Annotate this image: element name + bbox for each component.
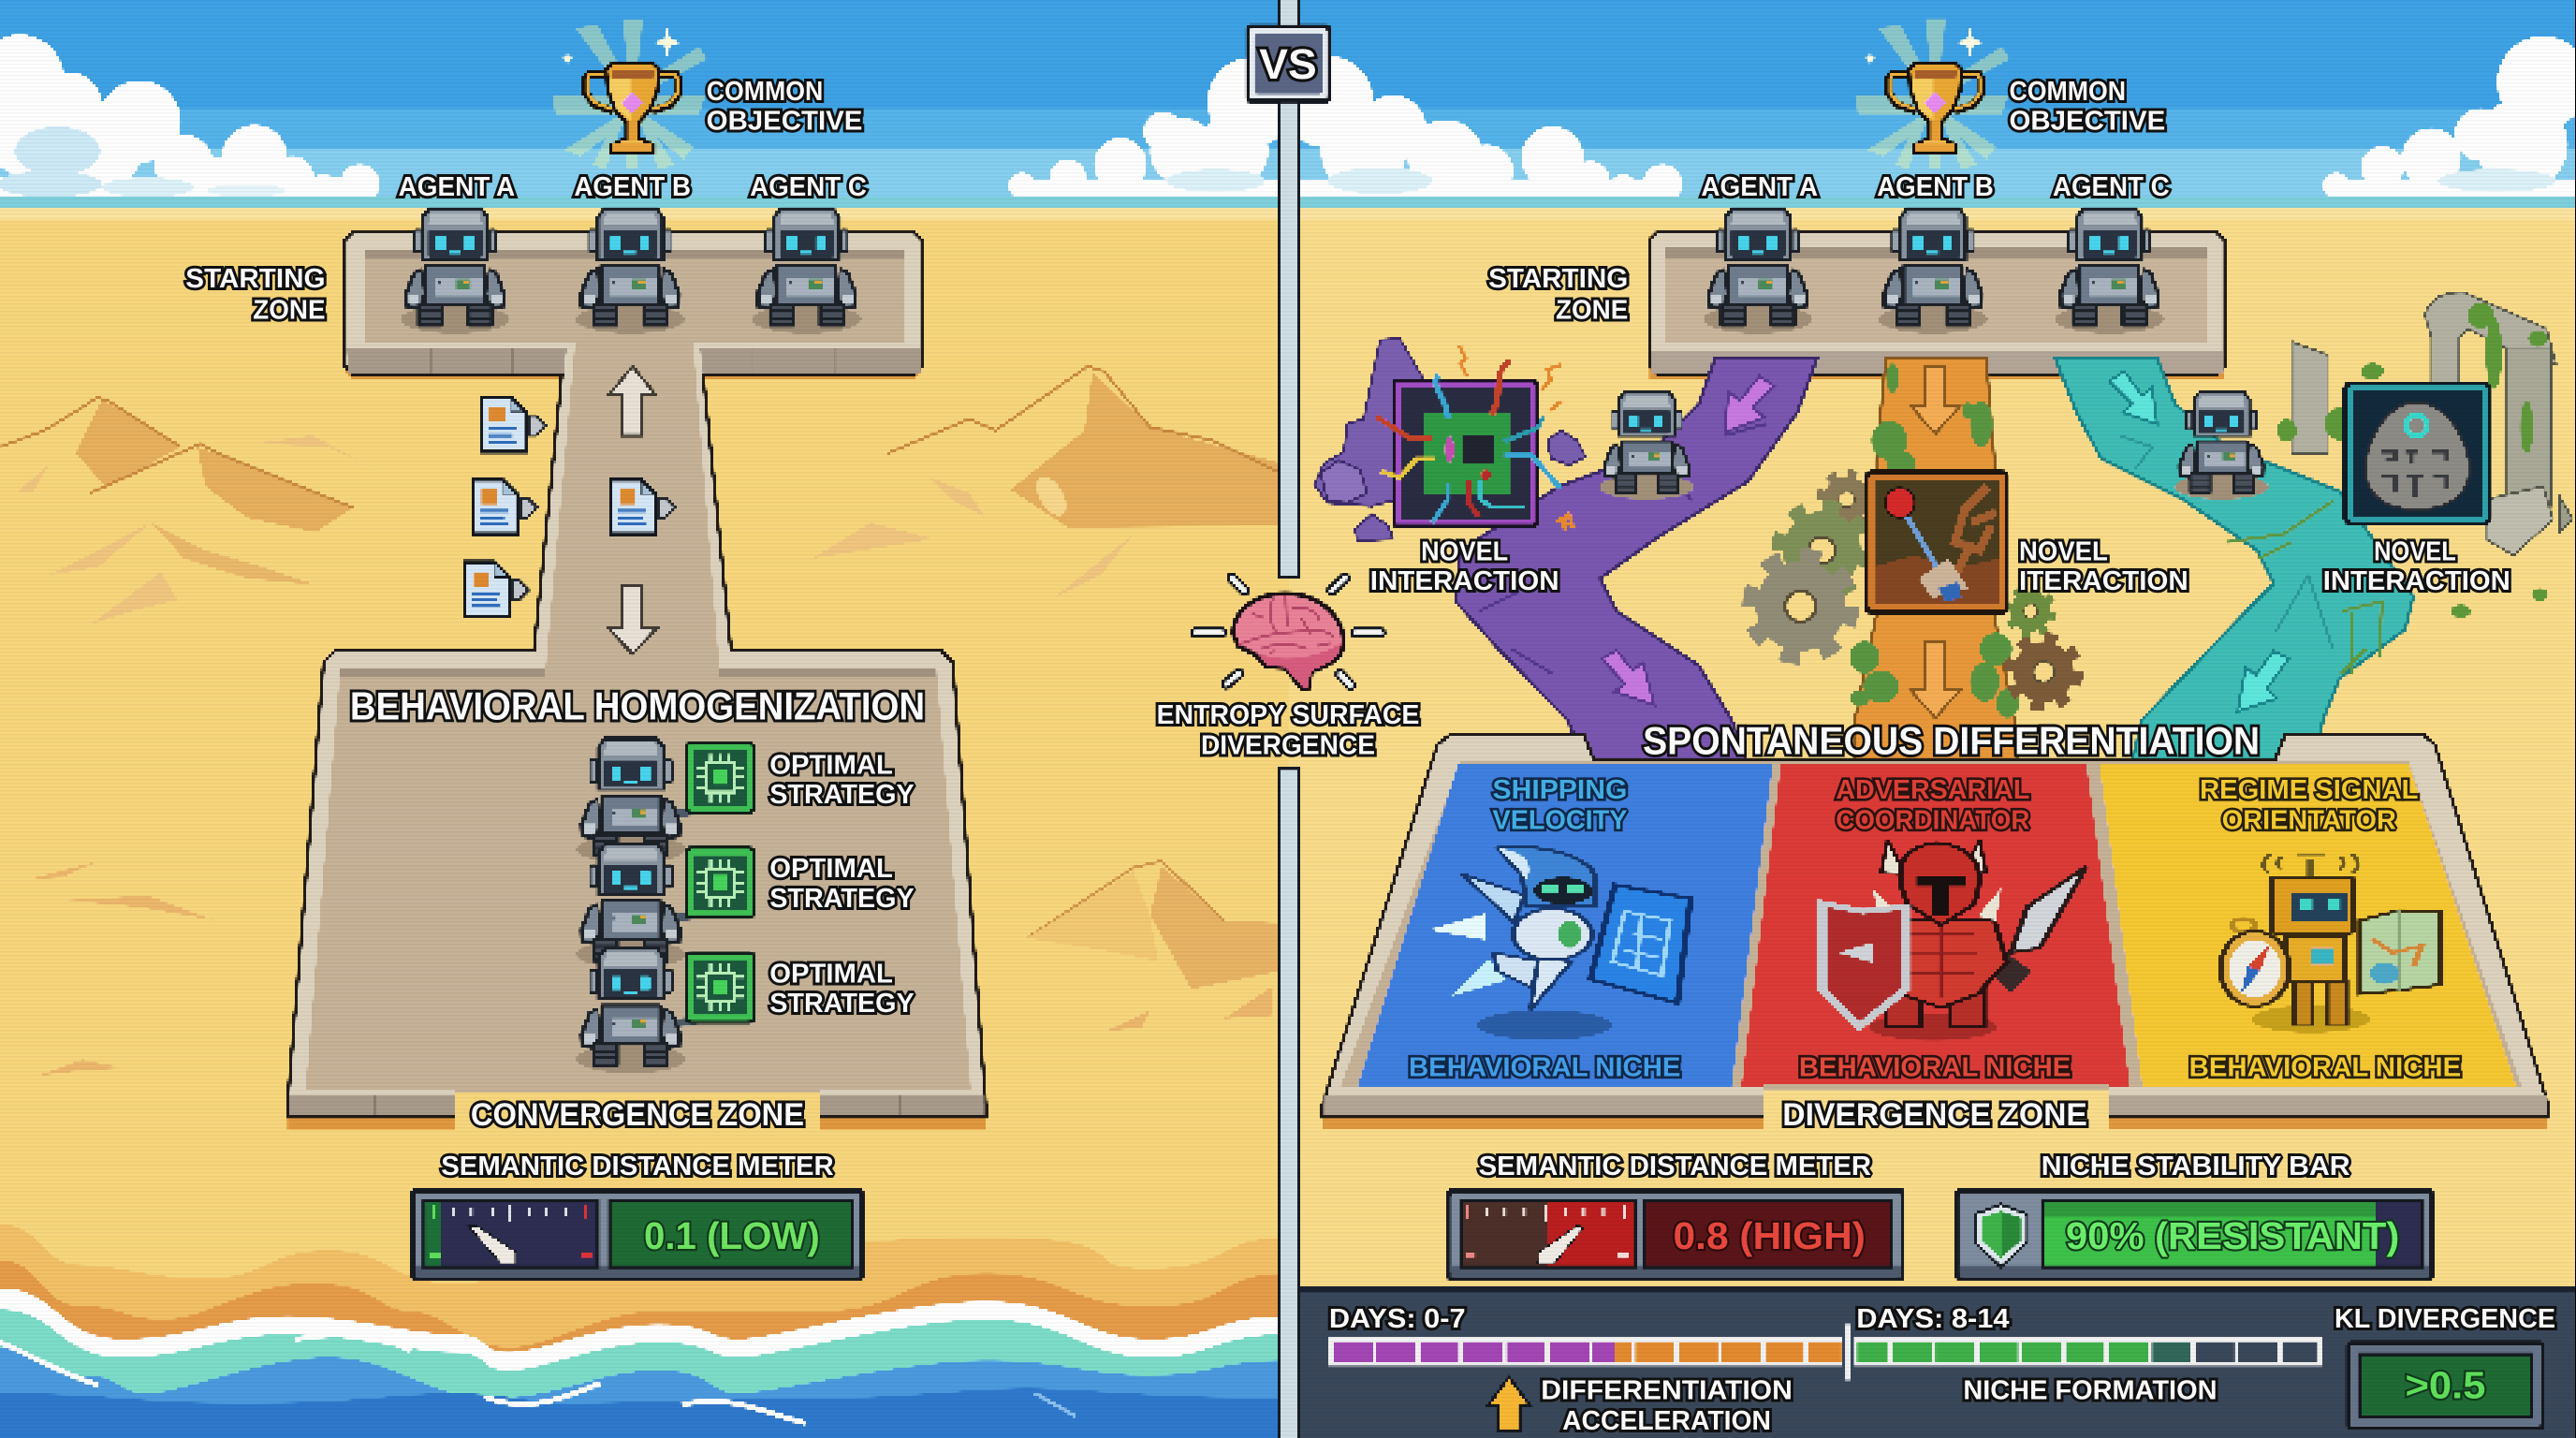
label: regime signal orientator <box>2200 775 2419 835</box>
beach and waves <box>0 1225 1288 1438</box>
label: adversarial coordinator <box>1836 775 2030 835</box>
label: optimal strategy 1 <box>769 751 915 810</box>
label: novel interaction teal <box>2323 536 2510 596</box>
label: optimal strategy 1: STRATEGY <box>769 780 915 810</box>
sand <box>0 207 1288 1292</box>
value: 0.1 low: 0.1 (LOW) <box>644 1214 820 1257</box>
label: agent names: AGENT A <box>399 172 515 202</box>
converged robots <box>577 737 703 1073</box>
label: niche formation: NICHE FORMATION <box>1963 1375 2217 1405</box>
label: common objective <box>2009 77 2165 137</box>
label: days 8-14: DAYS: 8-14 <box>1856 1304 2009 1334</box>
label: differentiation acceleration: DIFFERENTIATION <box>1541 1375 1793 1405</box>
label: behavioral niche yellow: BEHAVIORAL NICHE <box>2189 1053 2461 1083</box>
label: adversarial coordinator: COORDINATOR <box>1836 805 2030 835</box>
dunes right <box>30 366 1288 1077</box>
label: behavioral niche blue: BEHAVIORAL NICHE <box>1409 1053 1680 1083</box>
label: kl divergence: KL DIVERGENCE <box>2334 1304 2555 1334</box>
sand <box>1288 207 2576 1292</box>
document 2 <box>473 479 537 534</box>
sky <box>1288 0 2576 200</box>
label: entropy surface divergence: ENTROPY SURFACE <box>1157 700 1419 730</box>
horizon <box>0 198 1288 207</box>
label: agent names <box>1701 172 2170 202</box>
novel interaction: lever panel <box>1865 470 2009 614</box>
moss on orange path <box>1850 363 2019 718</box>
label: common objective: OBJECTIVE <box>2009 107 2165 137</box>
sparks <box>1459 345 1573 531</box>
purple path <box>1456 359 1817 772</box>
timeline hud panel <box>1295 1286 2576 1438</box>
dunes left <box>0 398 374 624</box>
label: semantic distance meter: SEMANTIC DISTANCE METER <box>1479 1152 1871 1181</box>
label: convergence zone: CONVERGENCE ZONE <box>471 1097 804 1133</box>
semantic distance meter left <box>411 1188 864 1282</box>
label: novel interaction purple <box>1370 536 1559 596</box>
left scene artwork <box>0 0 1296 1438</box>
label: adversarial coordinator: ADVERSARIAL <box>1836 775 2029 805</box>
label: differentiation acceleration: ACCELERATION <box>1562 1406 1771 1436</box>
label: novel interaction teal: INTERACTION <box>2323 566 2510 596</box>
label: novel interaction purple: NOVEL <box>1421 536 1508 566</box>
label: shipping velocity: SHIPPING <box>1493 775 1627 805</box>
document 1 <box>481 398 546 452</box>
divider top <box>1279 0 1298 578</box>
label: entropy surface divergence: DIVERGENCE <box>1201 731 1375 761</box>
label: starting zone: ZONE <box>1556 295 1628 325</box>
label: common objective: COMMON <box>2009 77 2126 107</box>
label: divergence zone: DIVERGENCE ZONE <box>1782 1097 2087 1133</box>
label: entropy surface divergence <box>1157 700 1419 761</box>
label: shipping velocity: VELOCITY <box>1493 805 1627 835</box>
label: regime signal orientator: ORIENTATOR <box>2222 805 2396 835</box>
teal path <box>2056 359 2413 772</box>
label: optimal strategy 3 <box>769 960 915 1019</box>
heading: spontaneous differentiation: SPONTANEOUS DIFFERENTIATION <box>1643 719 2260 763</box>
left scene labels <box>185 77 925 1257</box>
label: optimal strategy 2 <box>769 854 915 914</box>
clouds left <box>1281 56 1682 204</box>
niche character: regime signal robot <box>2220 854 2439 1033</box>
novel interaction: rune panel <box>2343 381 2492 526</box>
label: optimal strategy 1: OPTIMAL <box>769 751 893 781</box>
label: optimal strategy 2: OPTIMAL <box>769 854 893 884</box>
label: novel interaction purple: INTERACTION <box>1370 566 1559 596</box>
label: semantic distance meter: SEMANTIC DISTANCE METER <box>441 1152 834 1181</box>
label: shipping velocity <box>1493 775 1627 835</box>
clouds left <box>0 35 379 204</box>
agents A B C <box>1704 207 2164 333</box>
trophy left <box>552 19 707 169</box>
panel: left – behavioral homogenization <box>0 0 1296 1438</box>
label: agent names: AGENT C <box>2053 172 2170 202</box>
label: novel iteraction orange: NOVEL <box>2019 536 2108 566</box>
label: optimal strategy 3: OPTIMAL <box>769 960 893 990</box>
value: kl divergence threshold: >0.5 <box>2405 1364 2485 1407</box>
label: starting zone <box>1488 264 1628 325</box>
label: common objective: COMMON <box>707 77 823 107</box>
novel interaction: circuit panel <box>1376 360 1560 527</box>
ruins <box>2291 292 2572 555</box>
label: novel interaction teal: NOVEL <box>2374 536 2456 566</box>
gears <box>1754 476 2075 704</box>
label: starting zone: ZONE <box>253 295 326 325</box>
value: 90% resistant: 90% (RESISTANT) <box>2066 1214 2399 1257</box>
label: optimal strategy 3: STRATEGY <box>769 989 915 1019</box>
clouds right <box>2323 37 2576 198</box>
arrow up <box>609 366 655 435</box>
label: niche stability bar: NICHE STABILITY BAR <box>2042 1152 2350 1181</box>
moss on ruins <box>2277 302 2548 618</box>
heading: behavioral homogenization: BEHAVIORAL HOMOGENIZATION <box>350 684 925 728</box>
trophy right <box>1855 19 2010 169</box>
label: novel iteraction orange <box>2019 536 2188 596</box>
divider bottom <box>1279 769 1298 1438</box>
agents A B C <box>401 207 861 333</box>
starting platform <box>1649 231 2224 379</box>
purple rocks <box>1314 339 1586 540</box>
label: novel iteraction orange: ITERACTION <box>2019 566 2188 596</box>
label: agent names: AGENT C <box>750 172 867 202</box>
arrow down <box>607 585 657 654</box>
label: VS: VS <box>1259 40 1317 88</box>
label: common objective: OBJECTIVE <box>707 107 862 137</box>
path arrows <box>1602 366 2289 718</box>
brain rays <box>1195 578 1381 685</box>
semantic distance meter right <box>1446 1188 1905 1282</box>
clouds right <box>1009 57 1296 198</box>
label: agent names: AGENT A <box>1701 172 1818 202</box>
panel: right – spontaneous differentiation <box>1281 0 2576 1438</box>
label: agent names: AGENT B <box>1877 172 1994 202</box>
central artwork <box>552 0 2010 1438</box>
right scene labels <box>1329 77 2555 1436</box>
label: common objective <box>707 77 862 137</box>
orange path <box>1853 359 2017 772</box>
center column: divider, VS badge, brain <box>552 0 2010 1438</box>
purple cracks <box>1479 424 1766 674</box>
document 4 <box>611 479 675 534</box>
strategy chips <box>684 741 755 1024</box>
document 3 <box>465 562 529 616</box>
niche character: shipping velocity mech <box>1429 846 1690 1040</box>
right scene artwork <box>1281 0 2576 1438</box>
value: 0.8 high: 0.8 (HIGH) <box>1674 1214 1866 1257</box>
label: differentiation acceleration <box>1541 1375 1793 1436</box>
sky <box>0 0 1288 200</box>
label: agent names: AGENT B <box>574 172 691 202</box>
horizon <box>1288 198 2576 207</box>
label: optimal strategy 2: STRATEGY <box>769 884 915 914</box>
label: starting zone: STARTING <box>185 264 326 294</box>
label: starting zone: STARTING <box>1488 264 1628 294</box>
niche stability bar <box>1955 1188 2434 1282</box>
convergence platform <box>287 231 986 1136</box>
divergence zone platform <box>1323 735 2548 1137</box>
teal cracks and vines <box>2119 435 2333 649</box>
label: behavioral niche red: BEHAVIORAL NICHE <box>1799 1053 2071 1083</box>
wandering robots <box>1600 390 2268 499</box>
niche character: adversarial coordinator knight <box>1822 841 2086 1041</box>
label: agent names <box>399 172 867 202</box>
icon: brain <box>1233 594 1343 688</box>
label: starting zone <box>185 264 326 325</box>
label: days 0-7: DAYS: 0-7 <box>1329 1304 1466 1334</box>
VS badge <box>1246 24 1331 103</box>
label: regime signal orientator: REGIME SIGNAL <box>2200 775 2419 805</box>
